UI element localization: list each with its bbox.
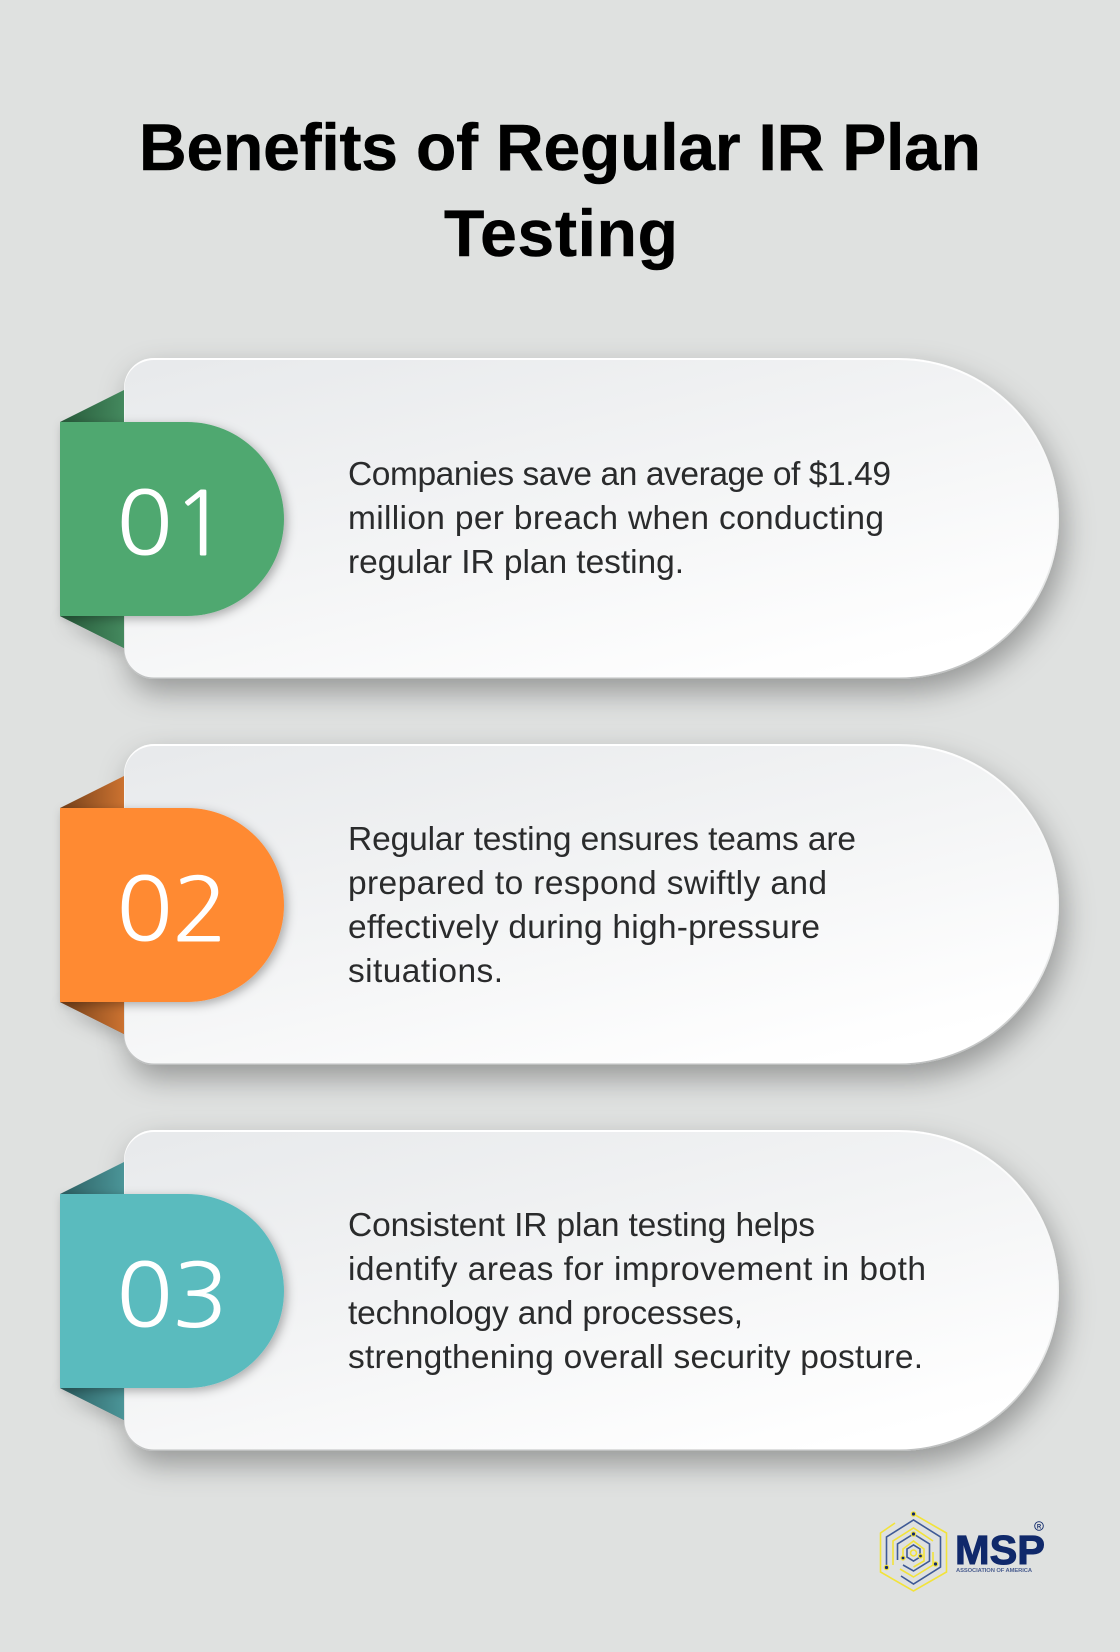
number 03: 03 xyxy=(116,1253,229,1341)
text: benefit 3 xyxy=(348,1207,926,1376)
number badge 3 xyxy=(60,1194,284,1388)
fold shadow 3 xyxy=(60,1388,124,1420)
registered mark xyxy=(1035,1522,1043,1530)
text: benefit 3: Consistent IR plan testing helps xyxy=(348,1207,815,1244)
text: benefit 1: Companies save an average of $1.49 xyxy=(348,456,891,493)
fold: bottom 2 xyxy=(60,1002,124,1034)
card body 2 xyxy=(124,744,1059,1065)
text: benefit 1 xyxy=(348,456,891,581)
panel: benefit 1 xyxy=(60,358,1059,679)
fold: top 1 xyxy=(60,390,124,422)
title: Benefits of Regular IR Plan xyxy=(139,110,981,184)
number badge 1 xyxy=(60,422,284,616)
fold: top 3 xyxy=(60,1162,124,1194)
text: benefit 1: million per breach when conducting xyxy=(348,500,884,537)
fold shadow 1 xyxy=(60,616,124,648)
text: benefit 3: strengthening overall security posture. xyxy=(348,1339,923,1376)
fold: bottom 3 xyxy=(60,1388,124,1420)
text: benefit 2: situations. xyxy=(348,953,503,990)
text: benefit 2: effectively during high-pressure xyxy=(348,909,820,946)
text: benefit 2: Regular testing ensures teams are xyxy=(348,821,856,858)
number 02: 02 xyxy=(116,867,229,955)
panel: benefit 3 xyxy=(60,1130,1059,1451)
text: benefit 3: technology and processes, xyxy=(348,1295,743,1332)
fold shadow 2 xyxy=(60,1002,124,1034)
fold: bottom 1 xyxy=(60,616,124,648)
card body 3 xyxy=(124,1130,1059,1451)
logo: MSP Association of America xyxy=(880,1512,1045,1591)
wordmark MSP: MSP xyxy=(955,1527,1045,1573)
text: benefit 1: regular IR plan testing. xyxy=(348,544,684,581)
icon: hexagon circuit xyxy=(880,1512,946,1591)
text: benefit 2 xyxy=(348,821,856,990)
number badge 2 xyxy=(60,808,284,1002)
tagline: ASSOCIATION OF AMERICA xyxy=(956,1568,1033,1574)
fold: top 2 xyxy=(60,776,124,808)
title: Testing xyxy=(444,196,678,270)
panel: benefit 2 xyxy=(60,744,1059,1065)
number 01: 01 xyxy=(116,481,229,569)
card body 1 xyxy=(124,358,1059,679)
registered mark: R xyxy=(1037,1524,1042,1530)
title xyxy=(139,110,981,270)
text: benefit 2: prepared to respond swiftly and xyxy=(348,865,827,902)
text: benefit 3: identify areas for improvement in both xyxy=(348,1251,926,1288)
